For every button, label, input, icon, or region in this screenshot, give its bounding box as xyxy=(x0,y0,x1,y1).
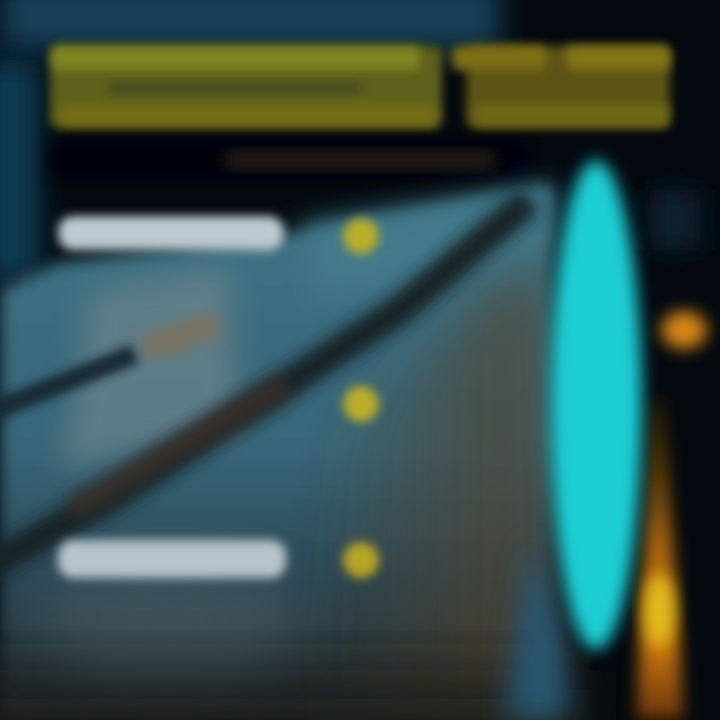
orange badge xyxy=(661,311,707,349)
subtitle: illegible faint line xyxy=(225,152,495,168)
cyan vertical ellipse xyxy=(550,160,642,650)
title: illegible yellow heading lines xyxy=(50,46,670,128)
perspective panel surface xyxy=(0,185,590,720)
label bar 2 xyxy=(58,540,286,578)
marker dot 3 xyxy=(343,542,379,578)
label bar 1 xyxy=(58,216,284,250)
marker dot 2 xyxy=(343,386,379,422)
orange light streak xyxy=(505,400,684,720)
dark diagonal seams xyxy=(0,200,530,565)
marker dot 1 xyxy=(343,218,379,254)
